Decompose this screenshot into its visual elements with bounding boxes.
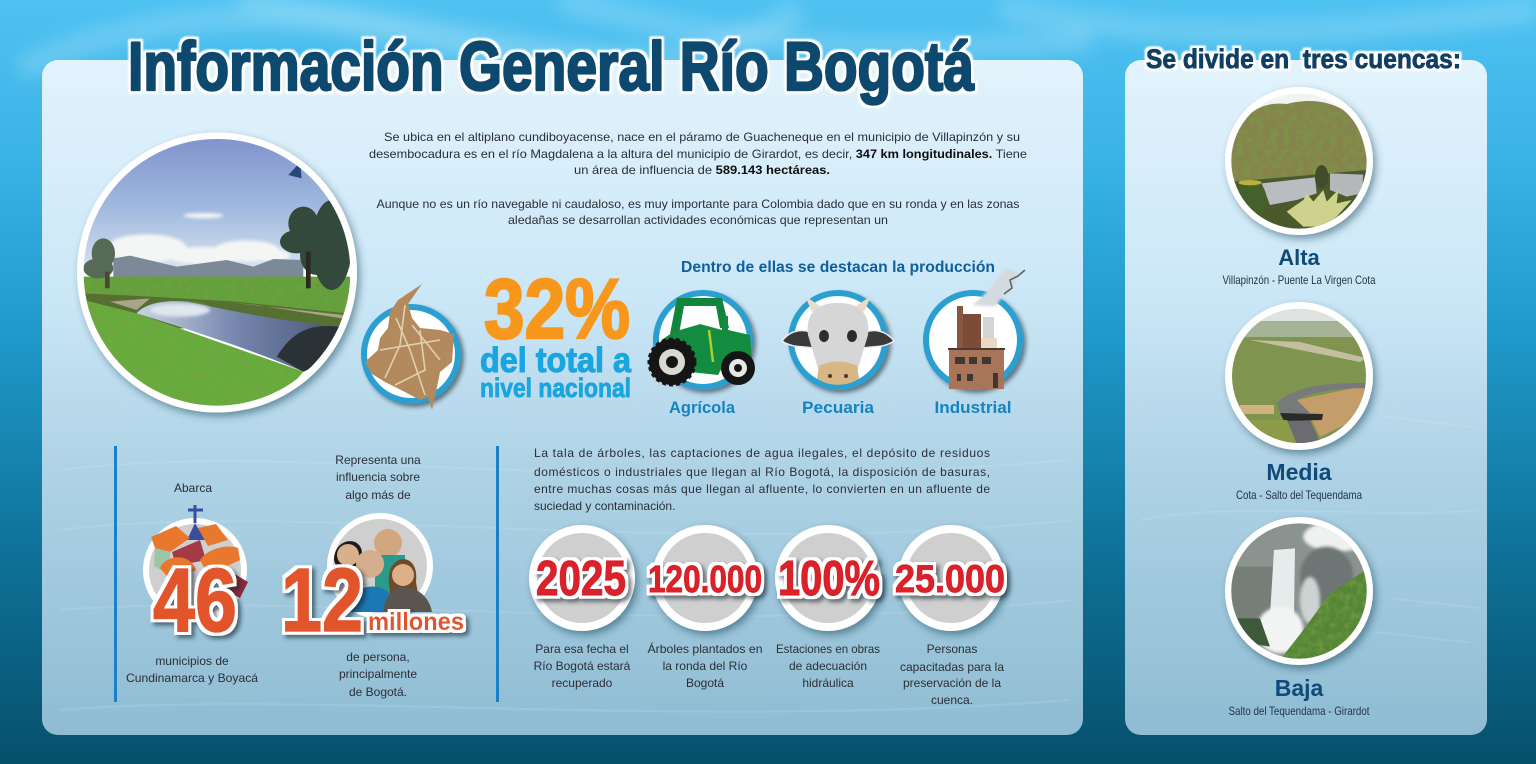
stat: 25.000: 25.000 [895,558,1005,601]
label: Alta: Alta [1278,245,1321,270]
text: municipios [126,654,258,685]
background waves [20,0,1536,70]
production heading: Dentro de ellas se destacan la producción [681,259,995,276]
label: Media: Cota - Salto del Tequendama [1236,488,1362,502]
stat: 12 millones [281,551,464,651]
stat: 32%: del total a [480,341,631,380]
caption: 120.000 [648,641,762,690]
caption: 100%: hidráulica [802,676,854,690]
text: representa [335,453,421,502]
stat: 25.000 [895,529,1005,627]
caption: 2025: recuperado [552,676,613,690]
label: Media [1236,459,1362,502]
label: Baja: Baja [1275,675,1323,701]
icon: factory [926,268,1025,389]
text: personas: de Bogotá. [349,685,407,699]
stat: 12 millones: millones [368,608,464,636]
text: representa: Representa una [335,453,421,467]
text: representa: algo más de [345,488,411,502]
divider: middle [496,446,499,702]
divider: left [114,446,117,702]
text: river problems [534,446,990,513]
caption: 120.000: Árboles plantados en [648,641,762,656]
text: river problems: domésticos o industriales que llegan al Río Bogotá, la disposición de basuras, [534,465,990,479]
panel wave highlights [60,416,1480,712]
caption: 25.000: preservación de la [903,676,1001,690]
caption: 25.000: capacitadas para la [900,660,1004,674]
stat: 100%: 100% [778,552,880,606]
label: Media: Media [1266,459,1332,485]
icon: cow [782,293,894,387]
label: Alta: Villapinzón - Puente La Virgen Cota [1222,273,1376,287]
intro text [369,130,1027,227]
stat: 100% [778,529,880,627]
text: Abarca: Abarca [174,481,212,495]
caption: 2025: Río Bogotá estará [534,659,631,673]
stat: 2025 [533,529,631,627]
caption: 120.000: la ronda del Río [663,659,748,673]
caption: 25.000 [900,642,1004,707]
text: river problems: suciedad y contaminación. [534,499,675,513]
icon: tractor [649,293,755,387]
icon: people [330,516,432,616]
text: personas [339,650,417,699]
label: Pecuaria: Pecuaria [802,398,875,417]
stat: 32% [480,262,631,403]
photo: lower basin [1225,517,1373,665]
text: personas: de persona, [346,650,410,664]
stat: 46: 46 [153,551,237,651]
caption: 2025 [534,642,631,690]
stat: 32%: 32% [484,262,630,356]
photo: middle basin [1225,302,1373,450]
intro text: desembocadura es en el río Magdalena a la altura del municipio de Girardot, es decir, 347 km longitudinales. Tiene [369,147,1027,161]
text: river problems: La tala de árboles, las captaciones de agua ilegales, el depósito de residuos [534,446,990,460]
stat: 2025: 2025 [536,552,626,606]
caption: 25.000: cuenca. [931,693,973,707]
label: Alta [1222,245,1376,287]
icon: church and houses [146,505,248,619]
icon: Colombia map [364,284,458,410]
photo: upper basin [1225,87,1373,237]
stat: 120.000 [648,529,762,627]
intro text: Aunque no es un río navegable ni caudaloso, es muy importante para Colombia dado que en su ronda y en las zonas [376,197,1020,211]
caption: 100%: de adecuación [789,659,867,673]
text: river problems: entre muchas cosas más que llegan al afluente, lo convierten en un afluente de [534,482,990,496]
label: Agrícola: Agrícola [669,398,736,417]
panel: main [42,60,1083,735]
photo: river landscape [70,125,370,412]
basins heading: Se divide en tres cuencas: [1146,44,1461,74]
intro text: aledañas se desarrollan actividades económicas que representan un [508,213,888,227]
stat: 120.000: 120.000 [648,559,762,601]
intro text: un área de influencia de 589.143 hectáreas. [574,163,830,177]
text: municipios: municipios de [155,654,229,668]
stat: 12 millones: 12 [281,551,363,651]
caption: 100%: Estaciones en obras [776,642,880,656]
label: Industrial: Industrial [934,398,1012,417]
caption: 120.000: Bogotá [686,676,724,690]
panel: basins [1125,60,1487,735]
stat: 32%: nivel nacional [480,373,631,403]
title: Información General Río Bogotá [128,28,974,105]
text: personas: principalmente [339,667,417,681]
label: Baja: Salto del Tequendama - Girardot [1228,704,1370,718]
caption: 25.000: Personas [927,642,977,656]
text: municipios: Cundinamarca y Boyacá [126,671,258,685]
intro text: Se ubica en el altiplano cundiboyacense, nace en el páramo de Guacheneque en el municipio de Villapinzón y su [384,130,1020,144]
caption: 100% [776,642,880,690]
text: representa: influencia sobre [336,470,420,484]
label: Baja [1228,675,1370,718]
caption: 2025: Para esa fecha el [535,642,629,656]
